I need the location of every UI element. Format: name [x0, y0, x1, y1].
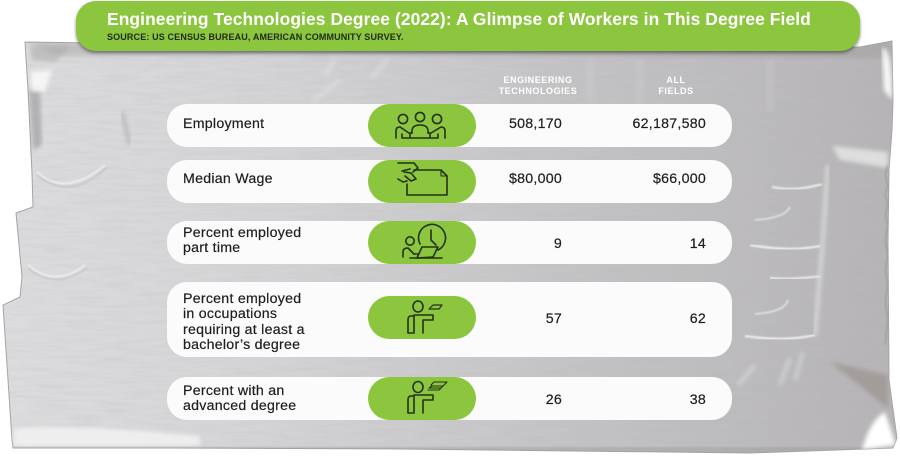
label: Median Wage: [183, 171, 273, 187]
value: all fields: 38: [690, 392, 706, 408]
icon: three people at a table: [368, 104, 476, 147]
column header: engineering technologies: [498, 75, 577, 96]
label: part time: [183, 240, 240, 256]
row: percent employed in occupations requiring a bachelor's degree: [167, 282, 732, 357]
icon: person presenting with one document: [368, 296, 476, 339]
icon: person presenting with stack of documents: [368, 377, 476, 420]
right creases: [832, 146, 888, 168]
label: in occupations: [183, 306, 277, 322]
value: engineering technologies: 9: [554, 236, 562, 252]
column header: engineering technologies: ENGINEERING: [503, 75, 573, 85]
bottom light edge: [14, 427, 200, 446]
label: Employment: [183, 116, 264, 132]
source note: SOURCE: US CENSUS BUREAU, AMERICAN COMMUNITY SURVEY.: [107, 32, 404, 42]
value: all fields: 62: [690, 311, 706, 327]
label: requiring at least a: [183, 322, 305, 338]
row: percent employed part time: [167, 221, 732, 264]
left creases: [37, 165, 105, 183]
label: [183, 225, 301, 256]
column header: all fields: FIELDS: [658, 86, 694, 96]
column header: all fields: [658, 75, 694, 96]
title banner: [76, 1, 860, 51]
row: percent with an advanced degree: [167, 377, 732, 420]
column header: engineering technologies: TECHNOLOGIES: [499, 86, 577, 96]
value: all fields: $66,000: [653, 171, 706, 187]
value: engineering technologies: $80,000: [509, 171, 562, 187]
column header: all fields: ALL: [666, 75, 686, 85]
row: employment: [167, 104, 732, 147]
label: [183, 383, 296, 414]
label: bachelor’s degree: [183, 337, 300, 353]
label: Percent employed: [183, 291, 301, 307]
right edge crinkle: [885, 165, 888, 345]
label: Percent employed: [183, 225, 301, 241]
label: [183, 291, 305, 353]
left shadow: [29, 88, 42, 150]
label: advanced degree: [183, 398, 296, 414]
value: engineering technologies: 508,170: [509, 116, 562, 132]
value: engineering technologies: 26: [546, 392, 562, 408]
top mid creases: [330, 61, 386, 74]
value: engineering technologies: 57: [546, 311, 562, 327]
value: all fields: 62,187,580: [632, 116, 706, 132]
icon: person at laptop with clock: [368, 221, 476, 264]
title: Engineering Technologies Degree (2022): A Glimpse of Workers in This Degree Field: [107, 9, 811, 29]
top fold band: [25, 42, 890, 58]
row: median wage: [167, 160, 732, 203]
icon: hand holding envelope: [368, 160, 476, 203]
value: all fields: 14: [690, 236, 706, 252]
label: Percent with an: [183, 383, 285, 399]
